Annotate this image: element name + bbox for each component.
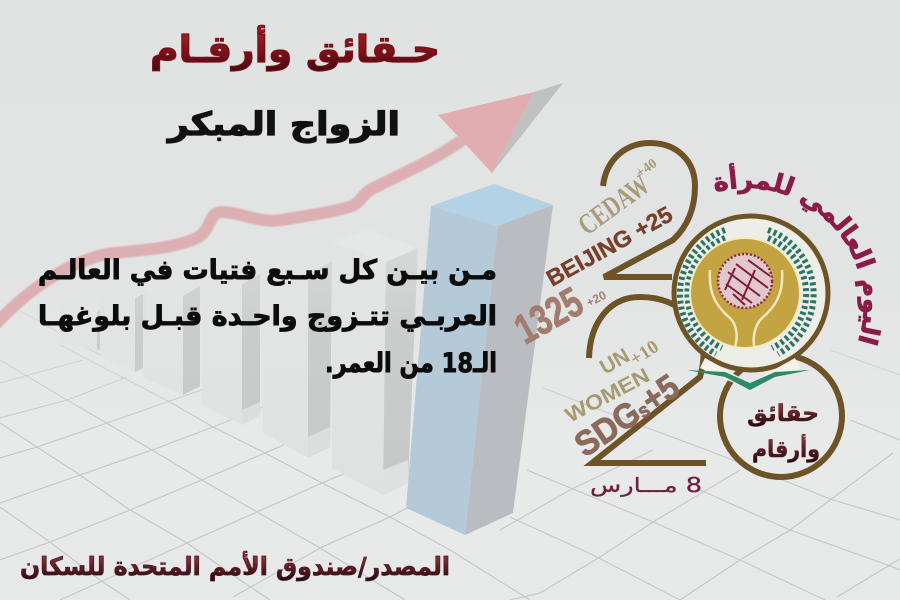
curved heading: اليوم العالمي للمرأة [714,162,882,346]
UN +10: +10 [626,336,663,370]
hands and trunk [710,270,782,349]
logo numerals: 2 0 2 0 strokes [589,143,842,477]
body line 3: الـ18 من العمر. [325,348,497,379]
trend arrow [0,83,563,326]
BEIJING +25: BEIJING +25 [542,201,677,291]
UN +10 [596,336,663,379]
source line: المصدر/صندوق الأمم المتحدة للسكان [20,551,450,582]
open book base [687,358,810,390]
bar 5 [143,282,200,395]
calligraphy medallion [718,254,772,308]
subtitle: الزواج المبكر [166,105,400,143]
body line 1: مـن بيـن كل سـبع فتيات في العالـم [38,255,497,286]
CEDAW +40: CEDAW [572,169,656,242]
UN +10: UN [596,344,634,379]
first digit 2 [603,143,695,277]
floor grid [0,300,900,600]
circle label line 1: حقائق [747,401,819,427]
emblem ring [674,216,828,370]
bar 3 [263,258,332,458]
title: حـقائق وأرقـام [150,25,440,72]
bar 2 [332,230,418,495]
1325 +20: 1325 [507,278,591,353]
body text [38,255,497,379]
gold disc [690,238,800,348]
wreath [680,230,814,354]
bar 7 [60,300,104,350]
highlighted blue bar [406,184,553,535]
bar 6 [100,286,147,372]
body line 2: العربـي تتـزوج واحـدة قبـل بلوغهـا [38,301,497,332]
CEDAW +40: +40 [634,156,660,181]
date: 8 مـــارس [590,473,702,497]
emblem [674,216,828,390]
SDGs+5: SDGs+5 [568,367,686,465]
logo [507,140,882,498]
bar 4 [202,270,260,425]
small digit 0 [720,355,842,477]
chart: 3D bars [60,184,553,535]
WOMEN: WOMEN [562,364,654,427]
calligraphy lines [725,260,770,305]
second digit 2 [589,297,706,463]
1325 +20: +20 [584,288,609,310]
circle label line 2: وأرقام [752,433,820,463]
